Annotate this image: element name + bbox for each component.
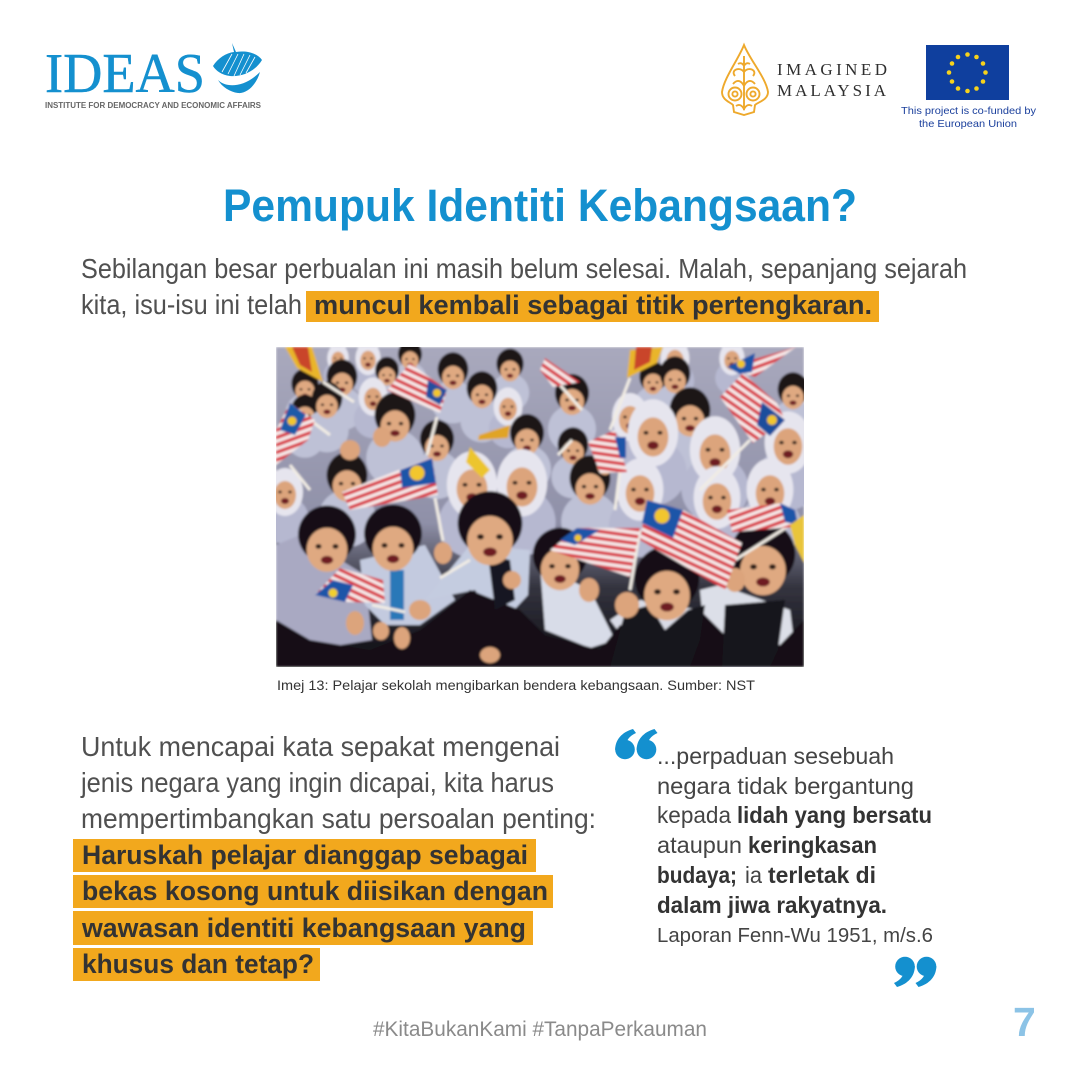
- pull quote: keringkasan: [748, 832, 877, 858]
- quote attribution: Laporan Fenn-Wu 1951, m/s.6: [657, 925, 933, 947]
- pull quote: ia: [745, 862, 762, 888]
- Imagined Malaysia wordmark: [777, 60, 887, 100]
- pull quote: kepada: [657, 802, 731, 828]
- pull quote: budaya;: [657, 862, 737, 888]
- intro paragraph: Sebilangan besar perbualan ini masih belum selesai. Malah, sepanjang sejarah: [81, 253, 967, 284]
- pull quote: dalam jiwa rakyatnya.: [657, 892, 887, 918]
- icon: IDEAS bird: [213, 43, 262, 93]
- EU funding statement: [901, 105, 1037, 130]
- IDEAS logo: [45, 43, 262, 110]
- middle row children: [261, 399, 819, 565]
- highlighted question: khusus dan tetap?: [82, 949, 314, 979]
- pull quote: lidah yang bersatu: [737, 802, 932, 828]
- intro paragraph: kita, isu-isu ini telah: [81, 289, 302, 320]
- photo: schoolchildren waving national flags: [261, 339, 819, 667]
- bottom dark trousers: [276, 590, 804, 667]
- hands: [340, 427, 745, 663]
- Imagined Malaysia wordmark: MALAYSIA: [777, 81, 887, 100]
- left paragraph: [80, 731, 596, 834]
- icon: gold wayang leaf: [722, 45, 768, 115]
- flag poles: [290, 378, 790, 612]
- EU funding statement: This project is co-funded by: [901, 105, 1037, 117]
- Imagined Malaysia logo: [722, 45, 887, 115]
- icon: opening quotation mark: [615, 729, 658, 759]
- pull quote: terletak di: [768, 862, 876, 888]
- EU funding statement: the European Union: [919, 118, 1017, 130]
- Imagined Malaysia wordmark: IMAGINED: [777, 60, 887, 79]
- icon: EU flag: [926, 45, 1009, 100]
- pull quote: negara tidak bergantung: [657, 773, 914, 799]
- photo caption: Imej 13: Pelajar sekolah mengibarkan bendera kebangsaan. Sumber: NST: [277, 678, 755, 693]
- page number: 7: [1013, 999, 1036, 1045]
- IDEAS tagline: INSTITUTE FOR DEMOCRACY AND ECONOMIC AFFAIRS: [45, 101, 262, 110]
- icon: closing quotation mark: [894, 957, 936, 987]
- Malaysian and state flags: [276, 347, 804, 603]
- highlighted question: Haruskah pelajar dianggap sebagai: [82, 840, 528, 870]
- title: Pemupuk Identiti Kebangsaan?: [223, 180, 857, 231]
- pull quote: ...perpaduan sesebuah: [657, 743, 894, 769]
- left paragraph: jenis negara yang ingin dicapai, kita harus: [80, 767, 554, 798]
- EU co-funding logo: [901, 45, 1037, 130]
- left paragraph: mempertimbangkan satu persoalan penting:: [81, 803, 596, 834]
- highlighted question: [73, 839, 553, 981]
- pull quote: [615, 729, 936, 987]
- highlighted question: wawasan identiti kebangsaan yang: [81, 913, 526, 943]
- back row children: [286, 339, 815, 498]
- front row children: [298, 491, 795, 620]
- IDEAS wordmark: IDEAS: [45, 43, 205, 105]
- front row uniforms: [276, 535, 804, 667]
- intro paragraph: [81, 253, 967, 322]
- hashtags footer: #KitaBukanKami #TanpaPerkauman: [373, 1018, 707, 1041]
- pull quote: ataupun: [657, 832, 742, 858]
- highlighted phrase: muncul kembali sebagai titik pertengkaran.: [314, 290, 872, 320]
- left paragraph: Untuk mencapai kata sepakat mengenai: [81, 731, 560, 762]
- highlighted question: bekas kosong untuk diisikan dengan: [82, 876, 548, 906]
